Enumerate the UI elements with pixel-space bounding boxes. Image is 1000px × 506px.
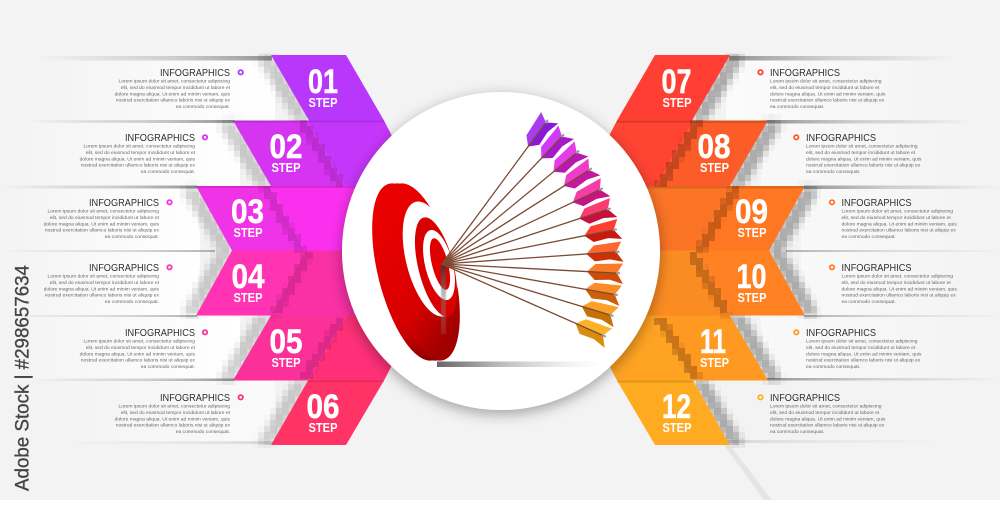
text block 07 (770, 67, 886, 110)
bullet 12 (758, 395, 763, 399)
text block 11: elit, sed do eiusmod tempor incididunt ut labore et (806, 345, 916, 351)
shape: step 12 (617, 380, 730, 445)
label: 03 step: STEP (234, 226, 262, 240)
shape: step 07 tail (591, 120, 694, 186)
arrow 5 (442, 178, 610, 264)
text block 06: Lorem ipsum dolor sit amet, consectetur adipiscing (118, 404, 230, 410)
shape: step 01 (271, 55, 384, 120)
target side wall (357, 176, 470, 368)
stock id, vertical: Adobe Stock | #298657634 (12, 265, 34, 491)
shape: step 04 tail (308, 316, 410, 380)
text block 12 (770, 392, 886, 435)
text block 01: Lorem ipsum dolor sit amet, consectetur adipiscing (118, 78, 230, 84)
text block 09: ea commodo consequat. (842, 234, 896, 240)
text block 06: ea commodo consequat. (176, 429, 230, 435)
shape: step 03 (196, 186, 305, 250)
text block 11: dolore magna aliqua. Ut enim ad minim veniam, quis (806, 351, 922, 357)
text block 12: nostrud exercitation ullamco laboris nisi ut aliquip ex (770, 423, 885, 429)
text block 05: INFOGRAPHICS (125, 327, 195, 339)
text block 12: elit, sed do eiusmod tempor incididunt ut labore et (770, 410, 880, 416)
text block 10: INFOGRAPHICS (842, 262, 912, 274)
text block 08 (806, 132, 922, 175)
target illustration (357, 176, 602, 368)
text block 01: nostrud exercitation ullamco laboris nisi ut aliquip ex (116, 98, 231, 104)
arrow 2 (442, 125, 574, 264)
text block 07: Lorem ipsum dolor sit amet, consectetur adipiscing (770, 78, 882, 84)
bullet 04 (167, 265, 172, 269)
text block 08: ea commodo consequat. (806, 169, 860, 175)
target floor shadow (437, 362, 602, 367)
shape: step 05 (233, 316, 347, 380)
text block 08: dolore magna aliqua. Ut enim ad minim veniam, quis (806, 156, 922, 162)
text block 04: ea commodo consequat. (105, 299, 159, 305)
bullet 01 (238, 70, 243, 75)
text block 01 (115, 67, 231, 110)
bullet 07 (758, 70, 763, 75)
shape: step 03 tail (270, 250, 410, 316)
text block 02 (80, 132, 196, 175)
shape: step 10 (696, 250, 805, 316)
bullet 06 (238, 395, 243, 399)
shape: step 11 (654, 316, 768, 380)
label: 06 step: STEP (308, 421, 338, 435)
text block 06 (115, 392, 231, 435)
text block 05: elit, sed do eiusmod tempor incididunt ut labore et (86, 345, 196, 351)
bullet 10 (830, 265, 834, 269)
label: 07 step (662, 63, 692, 110)
arrow fan (442, 111, 624, 348)
text block 03: nostrud exercitation ullamco laboris nisi ut aliquip ex (45, 228, 160, 234)
text block 04 (44, 262, 160, 305)
text block 06: dolore magna aliqua. Ut enim ad minim veniam, quis (115, 416, 231, 422)
label: 04 step: STEP (234, 291, 262, 305)
label: 11 step: 11 (700, 323, 726, 361)
label: 08 step: 08 (698, 128, 730, 166)
arrow 9 (442, 262, 624, 284)
text block 10 (842, 262, 957, 305)
label: 02 step: 02 (270, 128, 302, 166)
text block 11: INFOGRAPHICS (806, 327, 876, 339)
ribbon row edge shading (196, 120, 805, 382)
text block 02: Lorem ipsum dolor sit amet, consectetur adipiscing (84, 144, 195, 150)
text block 02: elit, sed do eiusmod tempor incididunt ut labore et (86, 150, 196, 156)
label: 12 step: 12 (662, 388, 691, 426)
label: 05 step: 05 (270, 323, 302, 361)
text block 01: dolore magna aliqua. Ut enim ad minim veniam, quis (115, 91, 231, 97)
text block 08: elit, sed do eiusmod tempor incididunt ut labore et (806, 150, 916, 156)
text block 10: elit, sed do eiusmod tempor incididunt ut labore et (842, 280, 951, 286)
arrow 10 (442, 264, 623, 306)
text block 12: Lorem ipsum dolor sit amet, consectetur adipiscing (770, 404, 882, 410)
shape: step 04 (196, 250, 305, 316)
text block 09: dolore magna aliqua. Ut enim ad minim veniam, quis (842, 221, 957, 227)
label: 01 step: 01 (308, 63, 338, 101)
text block 04: INFOGRAPHICS (89, 262, 159, 274)
text block 03: Lorem ipsum dolor sit amet, consectetur adipiscing (48, 208, 159, 214)
text block 12: dolore magna aliqua. Ut enim ad minim veniam, quis (770, 416, 886, 422)
text block 08: nostrud exercitation ullamco laboris nisi ut aliquip ex (806, 163, 921, 169)
bullet 03 (167, 200, 172, 204)
text block 05: nostrud exercitation ullamco laboris nisi ut aliquip ex (81, 358, 196, 364)
text block 08: Lorem ipsum dolor sit amet, consectetur adipiscing (806, 144, 918, 150)
text block 04: dolore magna aliqua. Ut enim ad minim veniam, quis (44, 286, 160, 292)
left row panels (0, 56, 275, 444)
label: 10 step: STEP (738, 291, 766, 305)
text block 11 (806, 327, 922, 370)
arrow 8 (442, 241, 624, 264)
inner mosaic shadows, left (261, 122, 347, 380)
text block 05: dolore magna aliqua. Ut enim ad minim veniam, quis (80, 351, 196, 357)
label: 05 step: STEP (272, 356, 300, 370)
arrow 12 (442, 264, 613, 348)
text block 10: nostrud exercitation ullamco laboris nisi ut aliquip ex (842, 293, 956, 299)
shape: step 07 (617, 55, 730, 120)
shape: step 02 (233, 120, 345, 186)
text block 12: ea commodo consequat. (770, 429, 824, 435)
shape: step 01 tail (307, 120, 410, 186)
text block 03: dolore magna aliqua. Ut enim ad minim veniam, quis (44, 221, 160, 227)
shape: step 06 (271, 380, 384, 445)
outer mosaic shadows, right (692, 55, 818, 445)
text block 11: nostrud exercitation ullamco laboris nisi ut aliquip ex (806, 358, 921, 364)
arrow 7 (442, 219, 622, 264)
text block 01: ea commodo consequat. (176, 104, 230, 110)
text block 09: elit, sed do eiusmod tempor incididunt ut labore et (842, 215, 951, 221)
text block 07: nostrud exercitation ullamco laboris nisi ut aliquip ex (770, 98, 885, 104)
text block 06: elit, sed do eiusmod tempor incididunt ut labore et (121, 410, 231, 416)
shape: step 02 tail (270, 186, 410, 250)
arrow 4 (442, 158, 600, 264)
centre white circle (342, 92, 660, 410)
text block 03: elit, sed do eiusmod tempor incididunt ut labore et (50, 215, 160, 221)
text block 01: INFOGRAPHICS (160, 67, 230, 79)
text block 07: INFOGRAPHICS (770, 67, 840, 79)
label: 12 step: STEP (662, 421, 692, 435)
bullet 11 (794, 330, 798, 334)
text block 04: elit, sed do eiusmod tempor incididunt ut labore et (50, 280, 160, 286)
text block 03 (44, 197, 160, 240)
bullet 08 (794, 135, 798, 140)
label: 10 step (736, 258, 766, 305)
label: 07 step: 07 (662, 63, 692, 101)
bullet 02 (203, 135, 207, 140)
bullet 09 (830, 200, 834, 204)
text block 04: nostrud exercitation ullamco laboris nisi ut aliquip ex (45, 293, 160, 299)
arrow 1 (442, 111, 558, 264)
left ribbon shapes 01-06 (196, 55, 410, 445)
text block 11: ea commodo consequat. (806, 364, 860, 370)
label: 04 step: 04 (232, 258, 264, 296)
text block 03: ea commodo consequat. (105, 234, 159, 240)
shape: step 09 tail (591, 250, 731, 316)
outer mosaic shadows, left (183, 55, 309, 445)
bullet 05 (203, 330, 207, 334)
text block 05 (80, 327, 196, 370)
text block 10: dolore magna aliqua. Ut enim ad minim veniam, quis (842, 286, 957, 292)
text block 05: ea commodo consequat. (141, 364, 195, 370)
inner mosaic shadows, right (654, 122, 740, 380)
text block 01: elit, sed do eiusmod tempor incididunt ut labore et (121, 85, 231, 91)
label: 11 step: STEP (700, 356, 729, 370)
shape: step 08 tail (591, 186, 731, 250)
text block 06: nostrud exercitation ullamco laboris nisi ut aliquip ex (116, 423, 231, 429)
label: 06 step: 06 (306, 388, 340, 426)
arrow 11 (442, 264, 620, 327)
text block 02: nostrud exercitation ullamco laboris nisi ut aliquip ex (81, 163, 196, 169)
label: 01 step: STEP (308, 96, 338, 110)
text block 07: elit, sed do eiusmod tempor incididunt ut labore et (770, 85, 880, 91)
arrow shadow on target (441, 266, 446, 334)
faint diagonal ray, right bottom (724, 445, 772, 500)
right ribbon shapes 07-12 (591, 55, 805, 445)
label: 08 step: STEP (700, 161, 729, 175)
text block 07: dolore magna aliqua. Ut enim ad minim veniam, quis (770, 91, 886, 97)
target face rings (367, 176, 475, 368)
text block 07: ea commodo consequat. (770, 104, 824, 110)
shape: step 10 tail (591, 316, 693, 380)
label: 10 step: 10 (736, 258, 766, 296)
arrow 3 (442, 141, 588, 264)
label: 11 step (700, 323, 729, 370)
text block 02: ea commodo consequat. (141, 169, 195, 175)
shape: step 09 (696, 186, 805, 250)
text block 09: INFOGRAPHICS (842, 197, 912, 209)
text block 11: Lorem ipsum dolor sit amet, consectetur adipiscing (806, 338, 918, 344)
label: 12 step (662, 388, 692, 435)
arrow 6 (442, 198, 617, 264)
text block 03: INFOGRAPHICS (89, 197, 159, 209)
step labels (231, 63, 768, 435)
label: 03 step: 03 (231, 193, 264, 231)
text block 12: INFOGRAPHICS (770, 392, 840, 404)
label: 02 step: STEP (272, 161, 300, 175)
text block 04: Lorem ipsum dolor sit amet, consectetur adipiscing (48, 274, 159, 280)
label: 07 step: STEP (662, 96, 692, 110)
text block 09: nostrud exercitation ullamco laboris nisi ut aliquip ex (842, 228, 956, 234)
text block 10: Lorem ipsum dolor sit amet, consectetur adipiscing (842, 274, 953, 280)
text block 08: INFOGRAPHICS (806, 132, 876, 144)
label: 09 step: STEP (738, 226, 766, 240)
text block 10: ea commodo consequat. (842, 299, 896, 305)
text block 05: Lorem ipsum dolor sit amet, consectetur adipiscing (84, 338, 195, 344)
text block 02: dolore magna aliqua. Ut enim ad minim veniam, quis (80, 156, 196, 162)
text block 02: INFOGRAPHICS (125, 132, 195, 144)
text block 06: INFOGRAPHICS (160, 392, 230, 404)
label: 09 step: 09 (735, 193, 768, 231)
shape: step 08 (656, 120, 768, 186)
label: 01 step (308, 63, 338, 110)
right row panels (726, 56, 1000, 443)
text block 09: Lorem ipsum dolor sit amet, consectetur adipiscing (842, 208, 953, 214)
text block 09 (842, 197, 957, 240)
